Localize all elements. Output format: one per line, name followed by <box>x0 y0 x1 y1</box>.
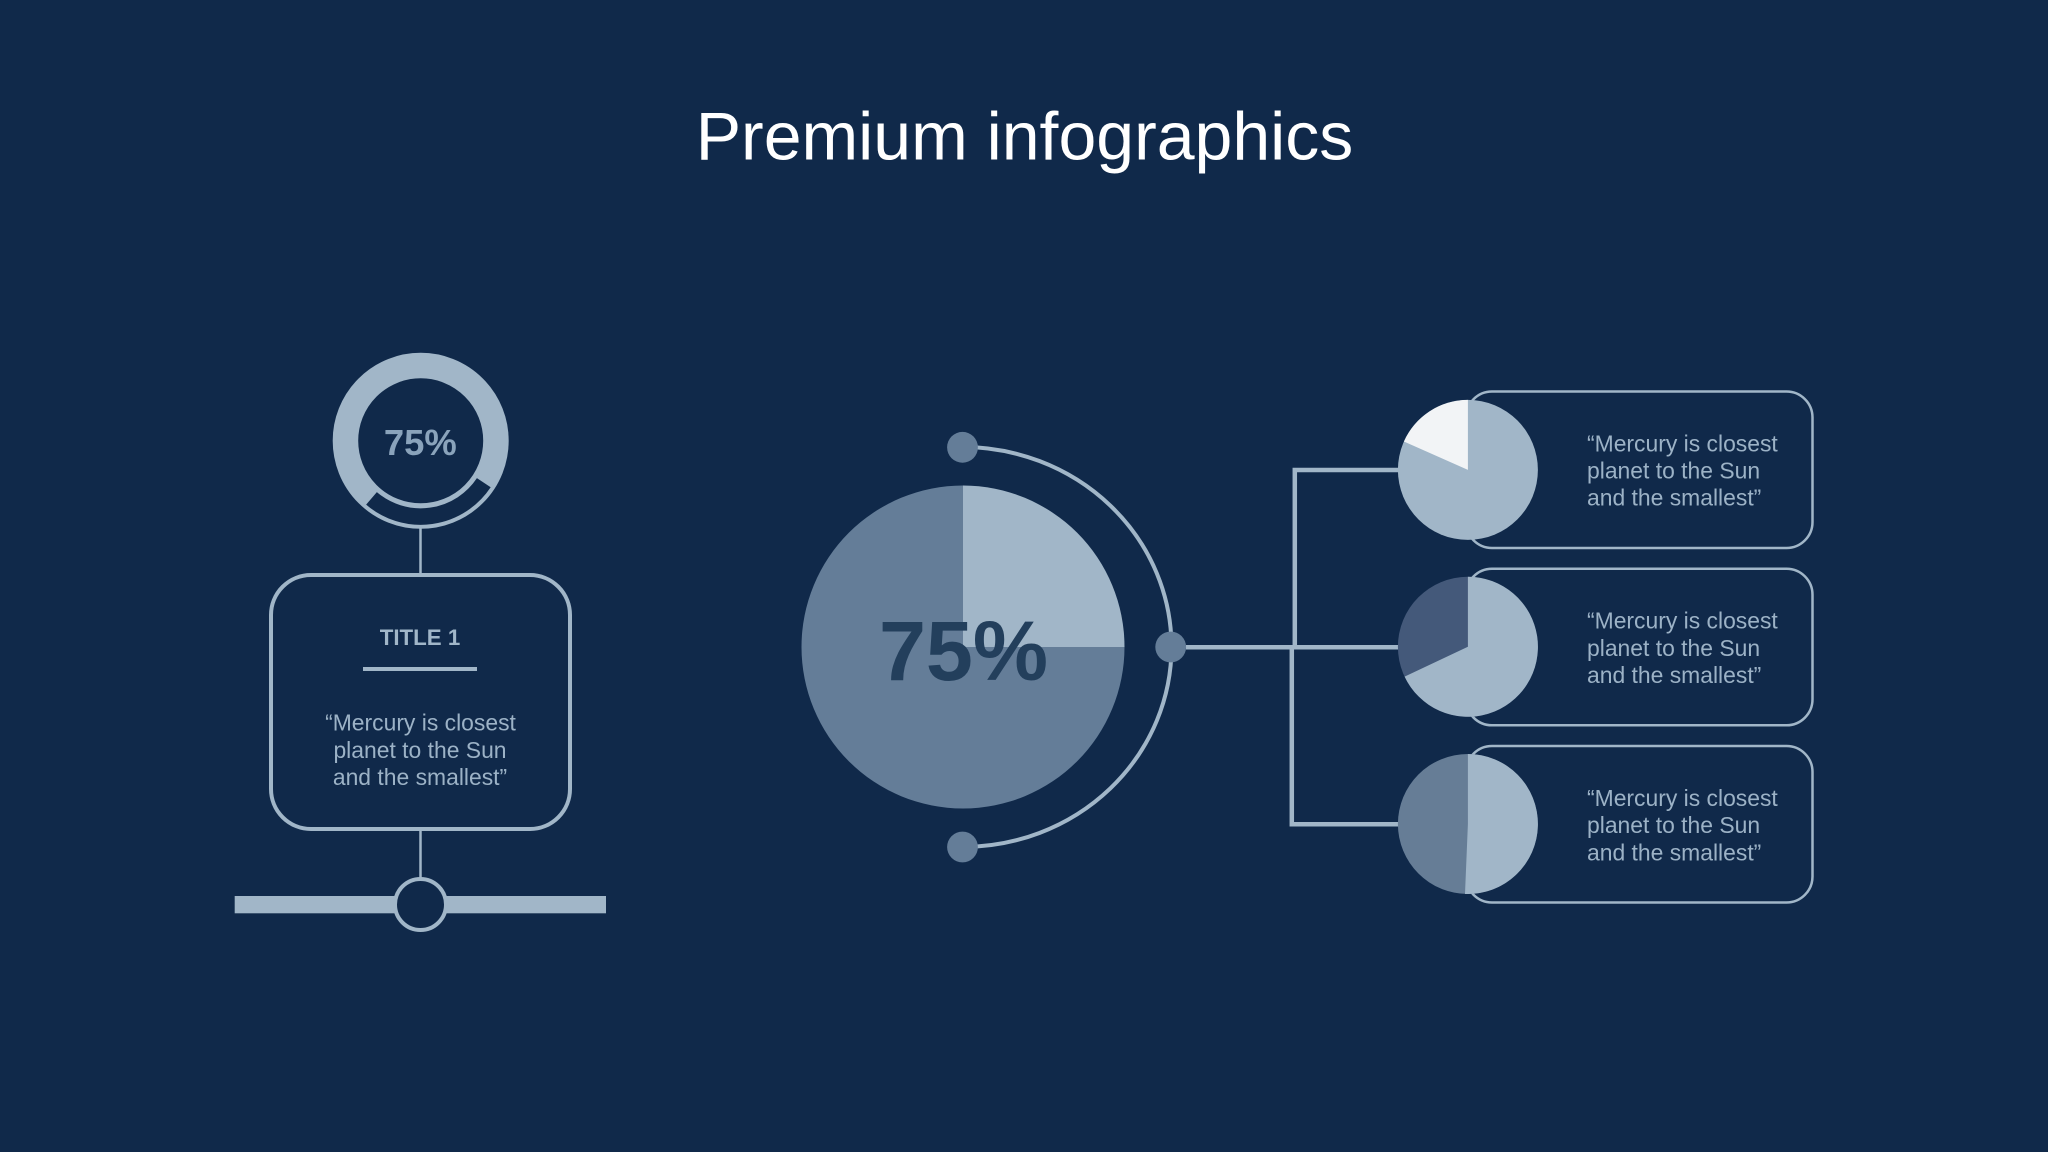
item 3 text: and the smallest” <box>1587 839 1761 865</box>
title: Premium infographics <box>696 98 1353 174</box>
item 1 text: and the smallest” <box>1587 484 1761 510</box>
item 3 text: planet to the Sun <box>1587 812 1760 838</box>
arc bottom dot <box>947 832 978 862</box>
arc middle dot <box>1155 632 1186 662</box>
connector: card to bar <box>419 829 422 880</box>
panel: item 1 <box>1398 392 1812 548</box>
pie chart: 75%: 75% <box>879 604 1048 698</box>
timeline bar with node <box>235 879 606 930</box>
item 2 text: planet to the Sun <box>1587 635 1760 661</box>
pie chart: 75% <box>802 486 1124 808</box>
item 1 box <box>1466 392 1812 548</box>
item 1 text: “Mercury is closest <box>1587 430 1778 456</box>
panel: central pie with arc <box>802 432 1186 862</box>
connector: donut to card <box>419 526 422 576</box>
item 1 text: planet to the Sun <box>1587 458 1760 484</box>
heading underline <box>363 667 477 671</box>
donut chart: 75% <box>345 366 496 517</box>
card: title 1 <box>271 575 570 829</box>
card heading: TITLE 1 <box>380 625 460 650</box>
panel: left title card column <box>235 366 606 930</box>
panel: item 3 <box>1398 746 1812 902</box>
donut chart: 75%: 75% <box>384 422 457 463</box>
item 2 pie <box>1398 577 1538 717</box>
item 3 pie <box>1398 754 1538 894</box>
item 3 text: “Mercury is closest <box>1587 785 1778 811</box>
panel: item 2 <box>1398 569 1812 725</box>
arc around pie <box>962 447 1171 847</box>
item 1 pie <box>1398 400 1538 540</box>
card text: planet to the Sun <box>333 737 507 763</box>
card text: and the smallest” <box>333 764 507 790</box>
item 2 text: “Mercury is closest <box>1587 608 1778 634</box>
item 3 box <box>1466 746 1812 902</box>
item 2 box <box>1466 569 1812 725</box>
arc top dot <box>947 432 978 463</box>
item 2 text: and the smallest” <box>1587 662 1761 688</box>
card text: “Mercury is closest <box>325 710 517 736</box>
connector tree <box>1186 470 1400 824</box>
